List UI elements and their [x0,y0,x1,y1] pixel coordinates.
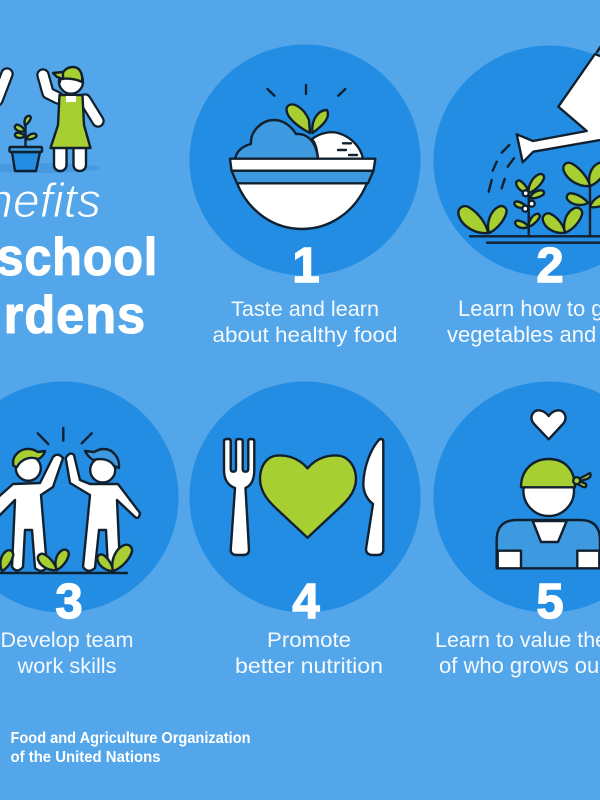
ground shadow [0,163,100,173]
icon: farmer with heart [497,410,600,568]
girl gardener [43,67,98,171]
caption 4: Promote [267,629,351,652]
caption 1: Taste and learn [231,298,379,321]
circle [0,382,178,612]
panel 3: team work [0,382,178,678]
panel 2: grow vegetables [434,46,600,347]
circle [434,46,600,276]
number 4: 4 [292,575,320,629]
caption 4: better nutrition [235,655,383,678]
number 5: 5 [536,575,564,629]
title [0,175,158,345]
circle [190,382,420,612]
icon: watering can and plants [454,46,600,243]
footer: organization name: Food and Agriculture Organization [10,730,250,747]
other gardener's raised arm [0,74,7,100]
number 2: 2 [536,239,564,293]
illustration: gardener with potted plant [0,67,100,173]
panel 4: better nutrition [190,382,420,678]
icon: fork, heart and knife [224,439,383,555]
panel 5: value of food growers [434,382,600,678]
circle [434,382,600,612]
icon: bowl of food [230,85,375,229]
caption 1: about healthy food [212,324,398,347]
footer: organization name [10,730,250,766]
number 3: 3 [55,575,83,629]
footer: organization name: of the United Nations [10,749,161,766]
icon: two gardeners high-fiving [0,428,140,575]
number 1: 1 [292,239,320,293]
circle [190,44,420,276]
caption 3: work skills [16,655,116,678]
potted plant [10,115,42,171]
caption 3: Develop team [0,629,134,652]
panel 1: healthy food [190,44,420,347]
